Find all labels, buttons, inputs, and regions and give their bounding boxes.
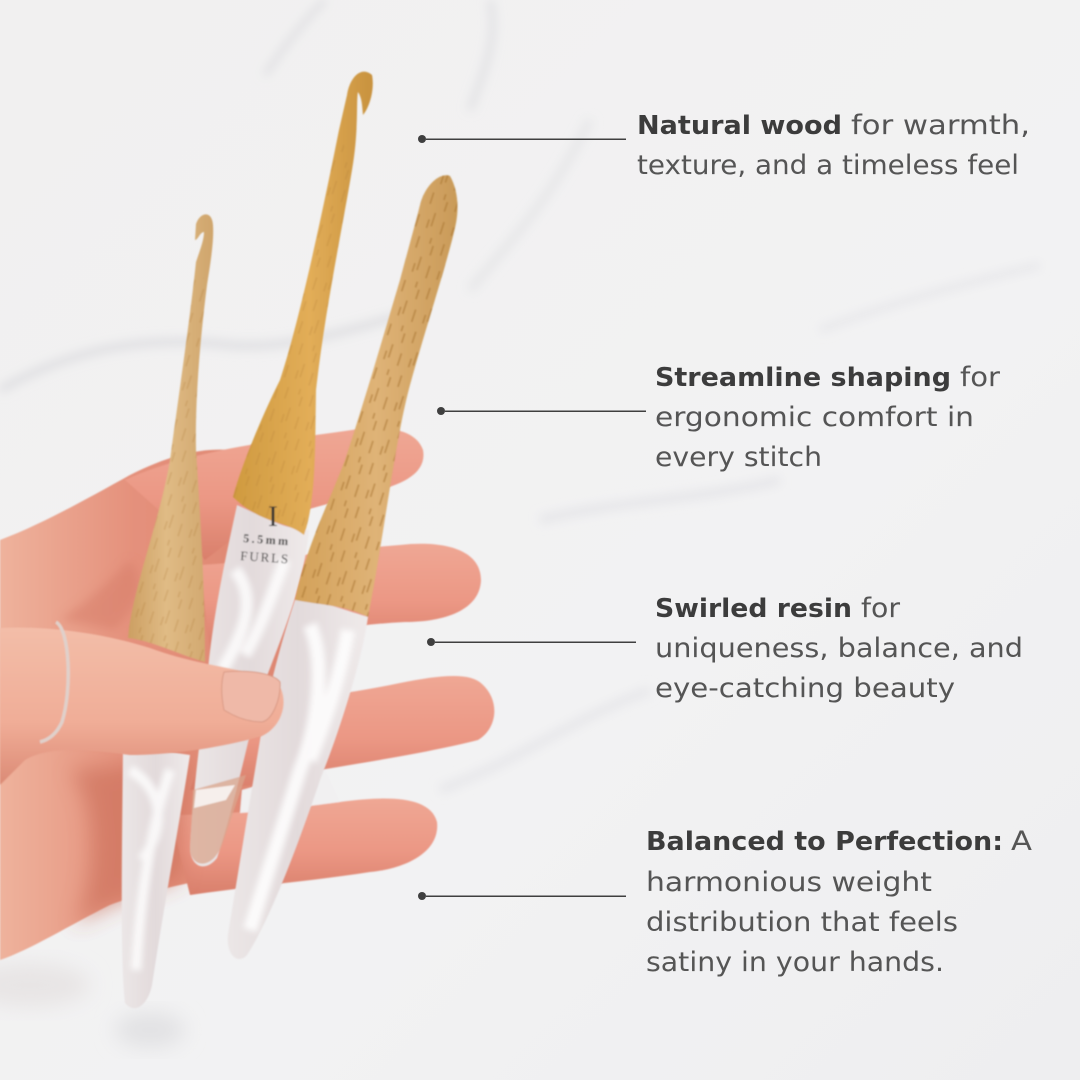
translucent tip (190, 775, 246, 864)
callout: balanced to perfection (418, 826, 1033, 978)
pinky finger (170, 799, 437, 895)
callout: natural wood (418, 110, 1030, 181)
wood shaft (233, 72, 373, 535)
wood shaft (295, 175, 457, 617)
thumbnail (222, 671, 280, 722)
wood grain (233, 130, 352, 535)
callout: streamline shaping (437, 362, 1001, 473)
resin handle (228, 600, 368, 959)
callout text: A (1011, 826, 1033, 857)
wood grain (128, 262, 207, 662)
leader line (437, 407, 646, 415)
finger crease shadow (60, 560, 138, 630)
leader line (427, 638, 636, 646)
callout text: Swirled resin (655, 594, 852, 624)
callout text: Streamline shaping (655, 363, 951, 393)
index finger (125, 428, 423, 560)
label text: FURLS (240, 548, 289, 566)
size mark: I (268, 500, 278, 533)
hook: right (228, 175, 457, 959)
silver ring (40, 622, 68, 742)
callout text: satiny in your hands. (646, 947, 944, 978)
resin handle (190, 505, 309, 866)
thumb with ring (0, 622, 284, 785)
resin handle (122, 745, 190, 1008)
ring finger (190, 676, 494, 790)
callout text: distribution that feels (646, 907, 958, 938)
label text (240, 531, 289, 566)
palm (0, 450, 300, 960)
callout text: texture, and a timeless feel (637, 150, 1019, 181)
callout: swirled resin (427, 593, 1023, 704)
callout text: for (861, 593, 901, 624)
callout text: for (960, 362, 1001, 393)
callout text: every stitch (655, 442, 822, 473)
leader line (418, 892, 626, 900)
hook: middle, 5.5mm (190, 72, 373, 866)
hand: palm and fingers (0, 428, 494, 960)
leader line (418, 135, 626, 143)
callout text: eye-catching beauty (655, 673, 955, 704)
callout text: harmonious weight (646, 867, 932, 898)
callout text: Balanced to Perfection: (646, 827, 1003, 857)
callout text: uniqueness, balance, and (655, 633, 1023, 664)
wood shaft (128, 214, 213, 662)
background gap between ring and pinky (240, 770, 340, 813)
callout text: Natural wood (637, 111, 842, 141)
callout text: for warmth, (851, 110, 1030, 141)
label text: 5.5mm (243, 531, 289, 548)
hook: left (122, 214, 213, 1008)
palm shadow (70, 760, 190, 925)
callout text: ergonomic comfort in (655, 402, 974, 433)
middle finger (200, 544, 481, 650)
wood grain (295, 175, 457, 617)
